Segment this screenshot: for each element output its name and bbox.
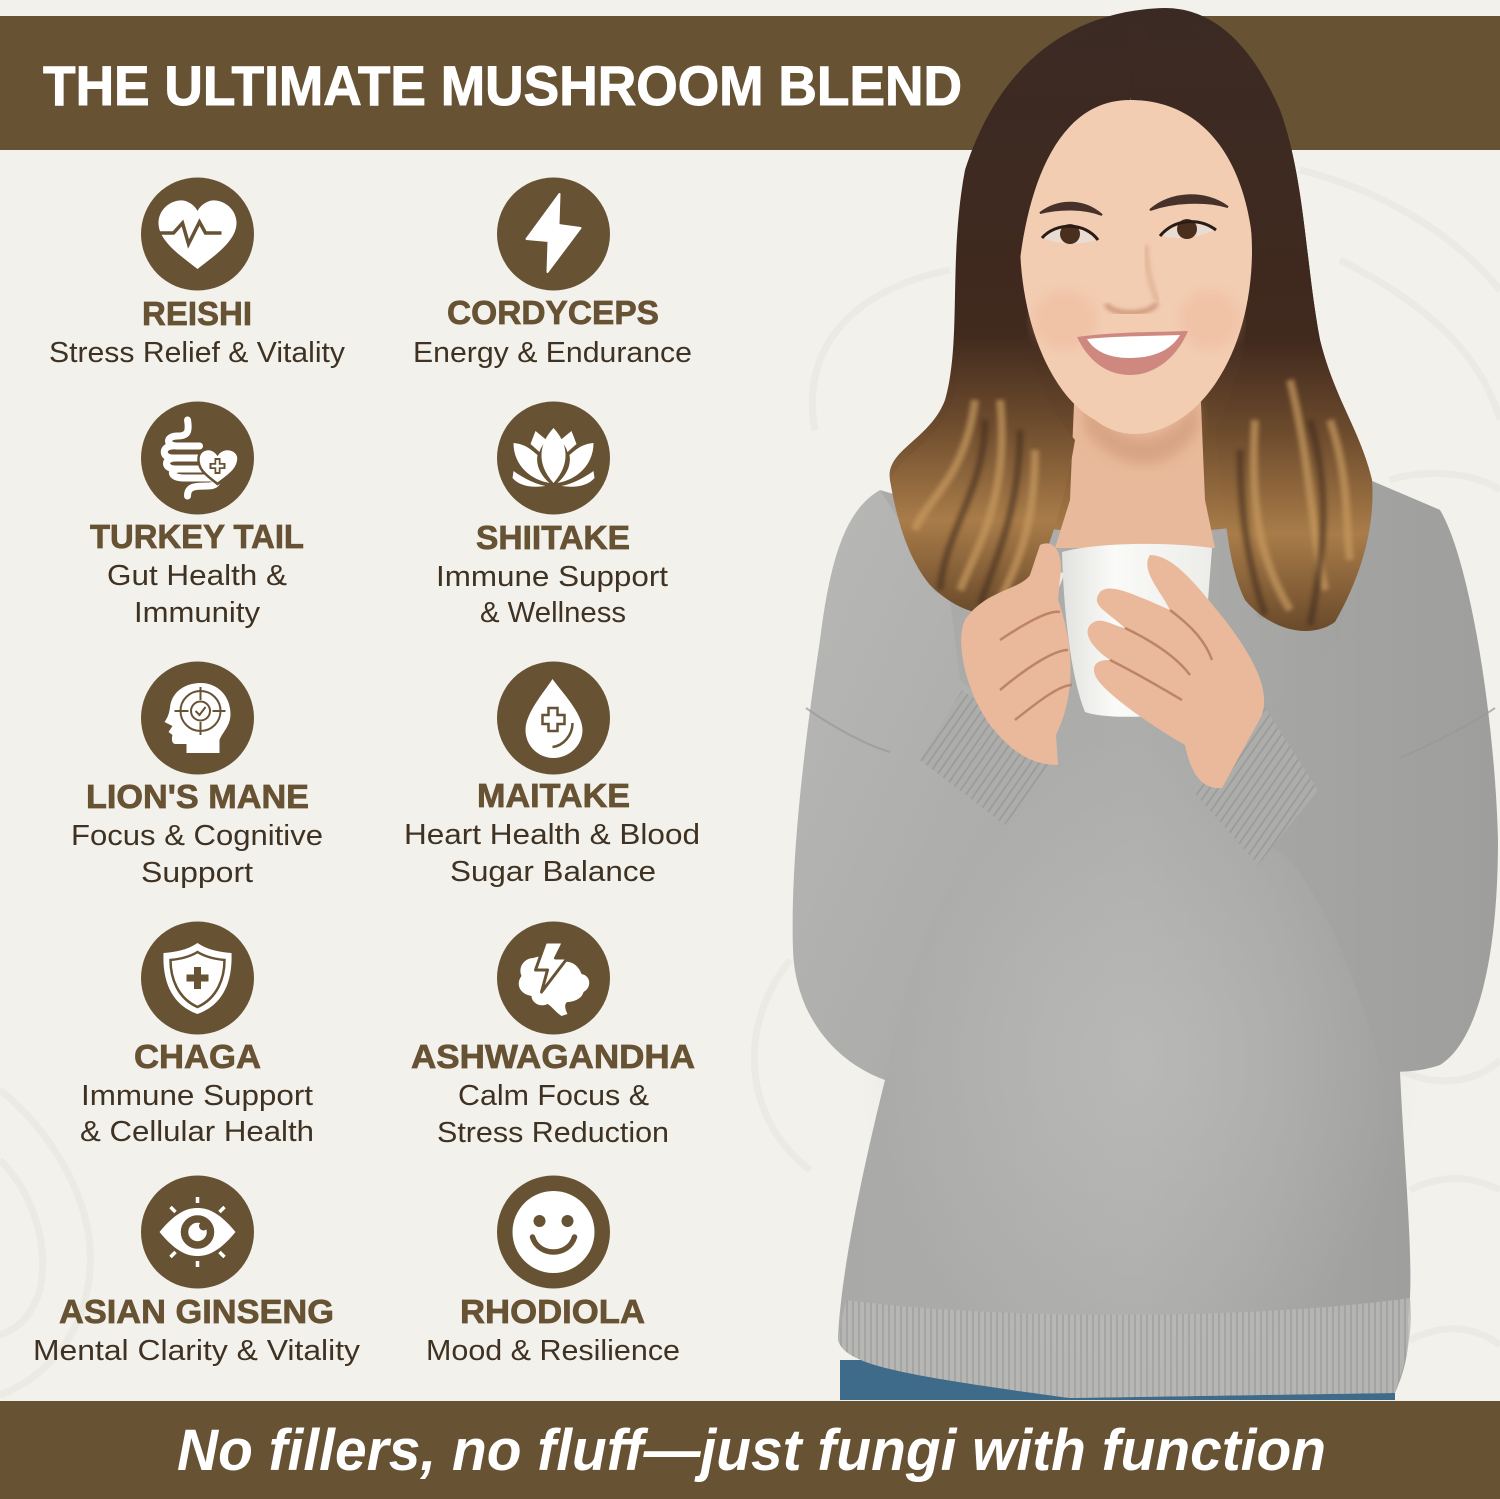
smile (1077, 331, 1188, 375)
left hand (961, 543, 1071, 765)
cheeks (1033, 290, 1097, 350)
icon: eye (141, 1176, 254, 1288)
icon: head with target (141, 662, 254, 774)
left hand finger lines (1000, 612, 1072, 720)
hair front right (1130, 25, 1373, 631)
icon: brain with bolt (497, 922, 610, 1034)
benefit line 1: Immune Support (436, 561, 668, 593)
hair front left (890, 28, 1130, 614)
item: Cordyceps (413, 178, 692, 369)
benefit: Mood & Resilience (426, 1335, 680, 1367)
name: LION'S MANE (86, 778, 309, 815)
name: MAITAKE (477, 777, 630, 814)
name: ASIAN GINSENG (59, 1293, 334, 1330)
benefit line 1: Calm Focus & (458, 1080, 649, 1112)
teeth (1087, 335, 1180, 358)
benefit line 1: Focus & Cognitive (71, 820, 323, 852)
item: Lion's Mane (71, 662, 323, 889)
neck shadow (1085, 395, 1198, 464)
benefit line 2: Sugar Balance (450, 856, 656, 888)
benefit line 2: & Cellular Health (80, 1116, 314, 1148)
icon: shield with cross (141, 922, 254, 1034)
cuffs (920, 690, 1058, 825)
icon: gut with heart (141, 402, 254, 514)
name: SHIITAKE (476, 519, 630, 556)
left sleeve (793, 490, 1056, 1080)
nose (1106, 303, 1157, 313)
benefit line 1: Gut Health & (107, 560, 287, 592)
right hand finger lines (1110, 610, 1212, 700)
eyebrows (1040, 203, 1102, 215)
face (1020, 98, 1252, 434)
header band (0, 16, 1500, 150)
icon: smiley (497, 1176, 610, 1288)
item: Shiitake (436, 402, 668, 629)
name: ASHWAGANDHA (411, 1038, 695, 1075)
sweater center highlight (860, 740, 1420, 1380)
shoulder seams (806, 708, 1495, 758)
footer tagline: No fillers, no fluff—just fungi with function (177, 1418, 1326, 1483)
name: CORDYCEPS (447, 294, 659, 331)
item: Asian Ginseng (33, 1176, 361, 1367)
right hand (1088, 555, 1264, 788)
neck (1055, 380, 1215, 548)
hem ribbing (838, 1298, 1411, 1398)
benefit: Stress Relief & Vitality (49, 337, 346, 369)
sweater body (838, 478, 1440, 1398)
icon: heart with pulse (141, 178, 254, 290)
icon: lightning bolt (497, 178, 610, 290)
item: Turkey Tail (90, 402, 304, 629)
benefit: Mental Clarity & Vitality (33, 1335, 361, 1367)
hair highlights (915, 380, 1350, 610)
item: Reishi (49, 178, 346, 369)
name: RHODIOLA (460, 1293, 645, 1330)
photo: woman holding mug (793, 8, 1498, 1400)
item: Maitake (404, 662, 700, 888)
jeans (840, 1360, 1395, 1400)
benefit: Energy & Endurance (413, 337, 692, 369)
icon: blood drop with cross (497, 662, 610, 774)
icon: lotus (497, 402, 610, 514)
benefit line 2: Stress Reduction (437, 1117, 669, 1149)
title: THE ULTIMATE MUSHROOM BLEND (43, 54, 962, 117)
benefit line 2: & Wellness (480, 597, 626, 629)
hair dark strands (940, 420, 1323, 625)
benefit line 1: Heart Health & Blood (404, 819, 700, 851)
benefit line 2: Immunity (134, 597, 261, 629)
footer band (0, 1401, 1500, 1499)
name: TURKEY TAIL (90, 518, 304, 555)
eyes (1044, 228, 1096, 244)
item: Ashwagandha (411, 922, 695, 1149)
item: Rhodiola (426, 1176, 680, 1367)
name: CHAGA (134, 1038, 261, 1075)
hair back (890, 8, 1373, 633)
mug (1033, 544, 1212, 717)
name: REISHI (142, 295, 252, 332)
benefit line 1: Immune Support (81, 1080, 313, 1112)
benefit line 2: Support (141, 857, 253, 889)
right sleeve (1192, 478, 1498, 1072)
item: Chaga (80, 922, 314, 1148)
